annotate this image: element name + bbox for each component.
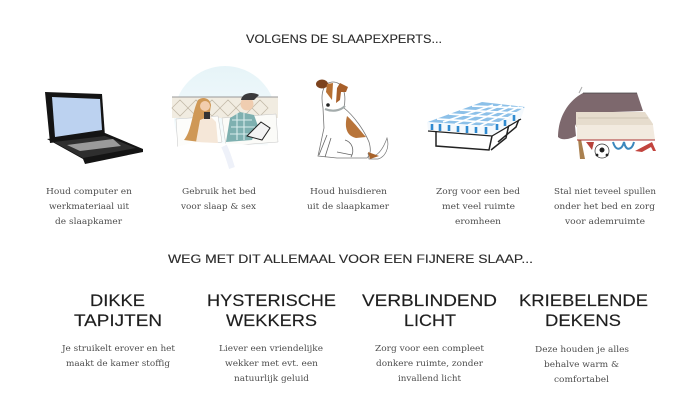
text: kriebelende dekens: behalve warm &	[544, 360, 619, 370]
title: hysterische wekkers	[207, 292, 336, 330]
column: verblindend licht	[362, 292, 497, 384]
icon: blanket and items under bed	[558, 87, 656, 159]
text: dikke tapijten: Je struikelt erover en het	[61, 344, 176, 354]
title: hysterische wekkers: WEKKERS	[226, 312, 317, 330]
text: tip bed space: eromheen	[455, 217, 502, 227]
text: tip storage: voor ademruimte	[564, 217, 645, 227]
text: tip computer: de slaapkamer	[55, 217, 123, 227]
text: tip bed space: met veel ruimte	[442, 202, 515, 212]
column: kriebelende dekens	[519, 292, 648, 385]
text: hysterische wekkers: natuurlijk geluid	[234, 374, 310, 384]
text: kriebelende dekens: Deze houden je alles	[535, 345, 629, 355]
text: verblindend licht: Zorg voor een compleet	[375, 344, 485, 354]
icon: bed with space	[427, 102, 525, 150]
text: dikke tapijten	[61, 344, 176, 369]
title: kriebelende dekens	[519, 292, 648, 330]
column: dikke tapijten	[61, 292, 176, 369]
text: tip storage	[554, 187, 657, 227]
text: tip pets: Houd huisdieren	[310, 187, 388, 197]
title: dikke tapijten	[74, 292, 162, 330]
text: tip bed space: Zorg voor een bed	[436, 187, 521, 197]
text: verblindend licht: donkere ruimte, zonder	[376, 359, 484, 369]
text: tip computer: Houd computer en	[46, 187, 133, 197]
text: hysterische wekkers	[219, 344, 323, 384]
text: tip storage: Stal niet teveel spullen	[554, 187, 657, 197]
title: dikke tapijten: DIKKE	[90, 292, 145, 310]
title: verblindend licht: VERBLINDEND	[362, 292, 497, 310]
text: tip bed space	[436, 187, 521, 227]
text: hysterische wekkers: Liever een vriendelijke	[219, 344, 323, 354]
icon: laptop	[45, 92, 143, 164]
text: tip bed use	[180, 187, 257, 212]
text: tip storage: onder het bed en zorg	[554, 202, 656, 212]
text: kriebelende dekens: comfortabel	[554, 375, 609, 385]
heading: weg met dit allemaal: WEG MET DIT ALLEMAAL VOOR EEN FIJNERE SLAAP...	[168, 254, 533, 266]
text: tip computer: werkmateriaal uit	[49, 202, 130, 212]
text: verblindend licht	[375, 344, 485, 384]
title: verblindend licht	[362, 292, 497, 330]
icon: couple in bed	[170, 66, 280, 172]
text: tip pets: uit de slaapkamer	[307, 202, 390, 212]
heading: volgens de slaapexperts: VOLGENS DE SLAAPEXPERTS...	[246, 34, 442, 46]
text: tip pets	[307, 187, 390, 212]
text: kriebelende dekens	[535, 345, 629, 385]
title: dikke tapijten: TAPIJTEN	[74, 312, 162, 330]
title: hysterische wekkers: HYSTERISCHE	[207, 292, 336, 310]
title: kriebelende dekens: DEKENS	[545, 312, 621, 330]
column: hysterische wekkers	[207, 292, 336, 384]
title: kriebelende dekens: KRIEBELENDE	[519, 292, 648, 310]
title: verblindend licht: LICHT	[404, 312, 456, 330]
text: hysterische wekkers: wekker met evt. een	[225, 359, 319, 369]
text: tip computer	[46, 187, 133, 227]
text: verblindend licht: invallend licht	[398, 374, 462, 384]
text: tip bed use: voor slaap & sex	[180, 202, 256, 212]
icon: dog	[316, 80, 388, 159]
text: tip bed use: Gebruik het bed	[182, 187, 257, 197]
text: dikke tapijten: maakt de kamer stoffig	[66, 359, 171, 369]
